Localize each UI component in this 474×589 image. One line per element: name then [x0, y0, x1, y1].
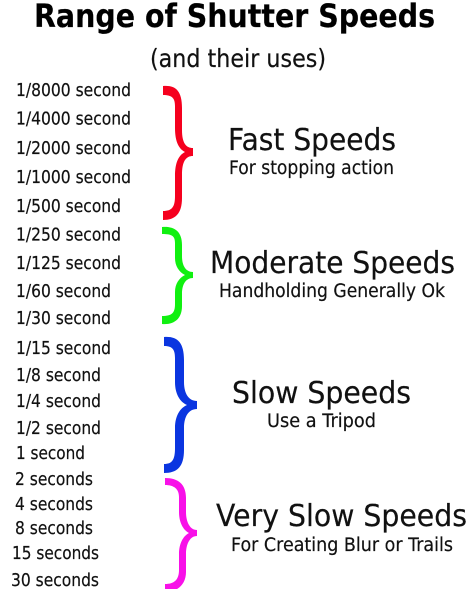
label: fast speeds: For stopping action: [229, 158, 394, 179]
label: very slow speeds: [216, 499, 467, 556]
label: moderate speeds: Moderate Speeds: [210, 246, 455, 281]
label: moderate speeds: Handholding Generally Ok: [219, 281, 445, 302]
list of shutter speeds: 1/4000 second: [16, 108, 131, 130]
label: moderate speeds: [210, 246, 455, 302]
list of shutter speeds: 1/250 second: [16, 224, 121, 246]
list of shutter speeds: 1 second: [16, 443, 85, 464]
list of shutter speeds: 4 seconds: [15, 494, 93, 515]
list of shutter speeds: 1/8000 second: [16, 80, 131, 101]
brace: moderate speeds (green): [162, 227, 193, 324]
list of shutter speeds: 1/8 second: [16, 365, 101, 386]
list of shutter speeds: 1/125 second: [16, 253, 121, 274]
list of shutter speeds: 1/15 second: [16, 338, 111, 359]
list of shutter speeds: 1/500 second: [16, 196, 121, 217]
list of shutter speeds: [11, 80, 131, 589]
list of shutter speeds: 1/30 second: [16, 308, 111, 329]
label: fast speeds: Fast Speeds: [228, 123, 396, 158]
list of shutter speeds: 1/1000 second: [16, 167, 131, 188]
label: slow speeds: [232, 376, 411, 432]
label: very slow speeds: For Creating Blur or Trails: [231, 535, 453, 556]
list of shutter speeds: 1/2 second: [16, 418, 101, 439]
brace: fast speeds (red): [163, 86, 193, 220]
list of shutter speeds: 2 seconds: [15, 469, 93, 490]
brace: slow speeds (blue): [164, 337, 197, 473]
list of shutter speeds: 15 seconds: [12, 543, 99, 564]
list of shutter speeds: 1/2000 second: [16, 138, 131, 159]
subtitle: (and their uses): [150, 44, 326, 73]
label: fast speeds: [228, 123, 396, 179]
label: very slow speeds: Very Slow Speeds: [216, 499, 467, 534]
list of shutter speeds: 1/60 second: [16, 281, 111, 302]
list of shutter speeds: 1/4 second: [16, 391, 101, 412]
list of shutter speeds: 8 seconds: [15, 518, 93, 539]
label: slow speeds: Use a Tripod: [267, 411, 376, 432]
brace: very slow speeds (magenta): [165, 478, 197, 589]
label: slow speeds: Slow Speeds: [232, 376, 411, 411]
